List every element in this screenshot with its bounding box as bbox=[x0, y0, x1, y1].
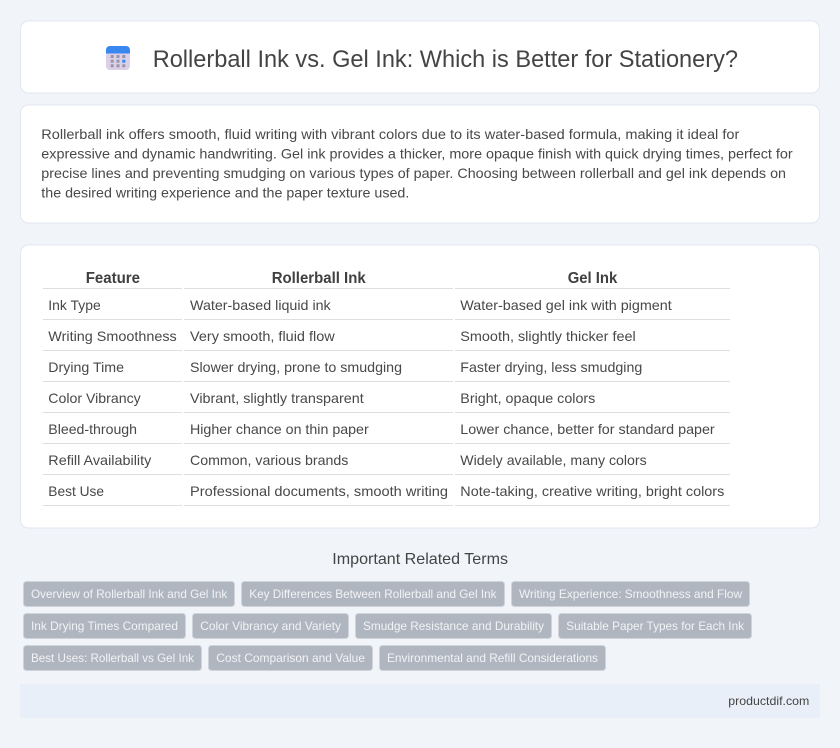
table header row bbox=[86, 270, 617, 287]
chip: environmental bbox=[380, 646, 606, 670]
row: refill availability bbox=[48, 452, 647, 468]
panel: comparison table bbox=[20, 245, 820, 528]
text block: summary: precise lines and preventing smudging on various types of paper. Choosing between rollerball and gel ink depends on bbox=[41, 165, 786, 181]
panel: summary paragraph bbox=[20, 105, 820, 223]
row: best use: Best Use bbox=[48, 483, 104, 499]
chip: overview bbox=[24, 582, 234, 606]
row: ink type: Water-based liquid ink bbox=[190, 297, 332, 313]
row: drying time bbox=[48, 359, 642, 375]
chip: writing experience bbox=[512, 582, 750, 606]
row: bleed-through: Higher chance on thin paper bbox=[190, 421, 369, 437]
row: writing smoothness: Very smooth, fluid flow bbox=[190, 328, 336, 344]
chip: writing experience: Writing Experience: Smoothness and Flow bbox=[519, 587, 742, 601]
row: drying time: Drying Time bbox=[48, 359, 124, 375]
chip: cost comparison: Cost Comparison and Value bbox=[216, 651, 365, 665]
chip: overview: Overview of Rollerball Ink and Gel Ink bbox=[31, 587, 228, 601]
chip: color vibrancy bbox=[192, 614, 348, 638]
row: best use: Note-taking, creative writing, bright colors bbox=[460, 483, 724, 499]
row: ink type bbox=[48, 297, 672, 313]
row: writing smoothness: Smooth, slightly thicker feel bbox=[460, 328, 636, 344]
row: bleed-through: Bleed-through bbox=[48, 421, 137, 437]
table header row: Rollerball Ink bbox=[272, 270, 366, 287]
row: color vibrancy: Vibrant, slightly transparent bbox=[190, 390, 364, 406]
chip: key differences bbox=[242, 582, 504, 606]
chip: smudge resistance: Smudge Resistance and Durability bbox=[363, 619, 544, 633]
chip: best uses: Best Uses: Rollerball vs Gel Ink bbox=[31, 651, 195, 665]
row: bleed-through bbox=[48, 421, 715, 437]
text block: summary bbox=[41, 126, 793, 201]
row: refill availability: Widely available, many colors bbox=[460, 452, 647, 468]
row: refill availability: Common, various brands bbox=[190, 452, 348, 468]
chip: cost comparison bbox=[208, 646, 372, 670]
panel: related term chips bbox=[24, 582, 752, 670]
row: color vibrancy bbox=[48, 390, 595, 406]
row: ink type: Water-based gel ink with pigment bbox=[460, 297, 672, 313]
chip: drying times bbox=[24, 614, 186, 638]
footer source: productdif.com bbox=[728, 694, 809, 708]
table header row: Gel Ink bbox=[568, 270, 617, 287]
row: refill availability: Refill Availability bbox=[48, 452, 151, 468]
chip: smudge resistance bbox=[356, 614, 552, 638]
row: best use bbox=[48, 483, 724, 499]
row: drying time: Faster drying, less smudging bbox=[460, 359, 642, 375]
row: ink type: Ink Type bbox=[48, 297, 101, 313]
chip: paper types: Suitable Paper Types for Each Ink bbox=[566, 619, 745, 633]
heading: important related terms: Important Related Terms bbox=[332, 551, 508, 568]
chip: color vibrancy: Color Vibrancy and Variety bbox=[200, 619, 341, 633]
title: Rollerball Ink vs. Gel Ink: Which is Better for Stationery? bbox=[153, 46, 738, 73]
row: bleed-through: Lower chance, better for standard paper bbox=[460, 421, 715, 437]
row: drying time: Slower drying, prone to smudging bbox=[190, 359, 402, 375]
chip: best uses bbox=[24, 646, 202, 670]
chip: environmental: Environmental and Refill Considerations bbox=[387, 651, 598, 665]
chip: key differences: Key Differences Between Rollerball and Gel Ink bbox=[249, 587, 497, 601]
row: best use: Professional documents, smooth writing bbox=[190, 483, 448, 499]
row: color vibrancy: Color Vibrancy bbox=[48, 390, 141, 406]
text block: summary: Rollerball ink offers smooth, fluid writing with vibrant colors due to its water-based formula, making it ideal for bbox=[41, 126, 740, 142]
chip: drying times: Ink Drying Times Compared bbox=[31, 619, 178, 633]
text block: summary: expressive and dynamic handwriting. Gel ink provides a thicker, more opaque finish with quick drying times, perfect for bbox=[41, 146, 793, 162]
table header row: Feature bbox=[86, 270, 140, 287]
text block: summary: the desired writing experience and the paper texture used. bbox=[41, 185, 409, 201]
row: color vibrancy: Bright, opaque colors bbox=[460, 390, 595, 406]
row: writing smoothness bbox=[48, 328, 636, 344]
chip: paper types bbox=[558, 614, 752, 638]
panel: title header bbox=[20, 21, 820, 93]
icon: calendar bbox=[106, 46, 130, 70]
row: writing smoothness: Writing Smoothness bbox=[48, 328, 177, 344]
footer bar bbox=[20, 684, 820, 718]
